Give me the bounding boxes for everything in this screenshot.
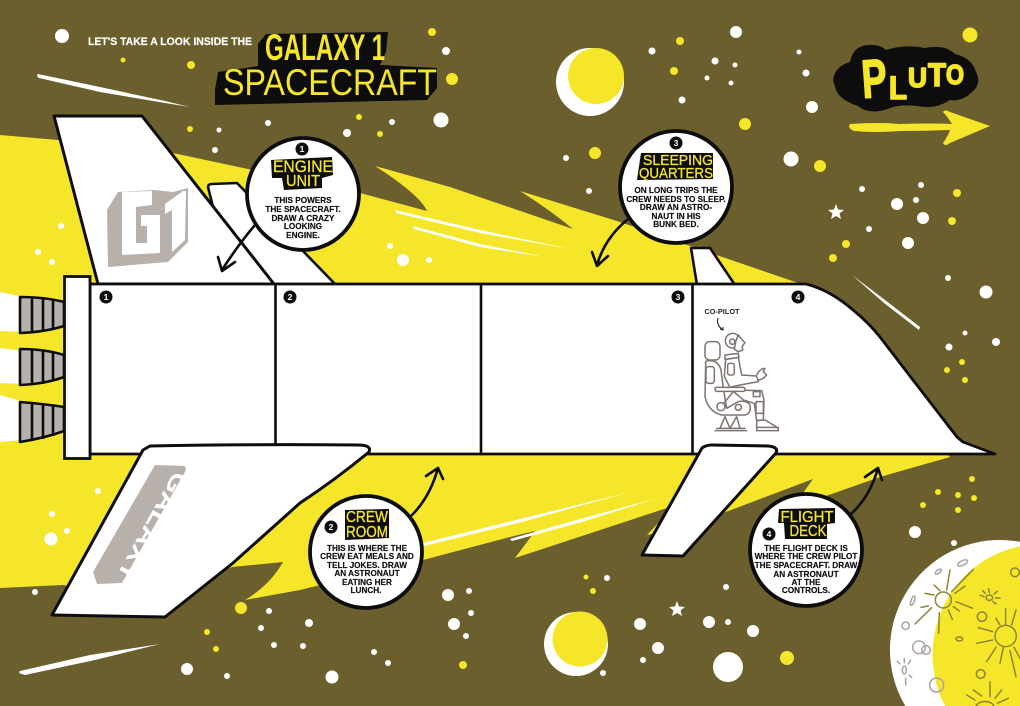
- arrow: flight deck: [850, 468, 882, 515]
- tail fin: [54, 116, 274, 284]
- G1 logo: [107, 188, 188, 267]
- planet with craters: [890, 540, 1020, 706]
- callout: flight deck: DECK: [790, 523, 827, 540]
- body text: TELL JOKES. DRAW: [327, 561, 407, 570]
- Pluto sign: O: [946, 59, 964, 90]
- top fin: [691, 248, 735, 285]
- right wing: [642, 445, 777, 556]
- main title: SPACECRAFT: [223, 62, 437, 103]
- body text: WHERE THE CREW PILOT: [755, 552, 857, 561]
- body text: BUNK BED.: [653, 220, 699, 229]
- body text: LOOKING: [284, 222, 322, 231]
- moon: top: [556, 48, 624, 116]
- moon: bottom: [544, 612, 608, 676]
- callout: engine unit: [247, 138, 359, 250]
- body text: ENGINE.: [286, 231, 320, 240]
- callout: crew room: [310, 496, 422, 608]
- wing lettering: [93, 465, 193, 587]
- callout: crew room: ROOM: [346, 524, 388, 541]
- wing lettering: GALAXY: [111, 467, 193, 587]
- body text: LUNCH.: [351, 586, 381, 595]
- callout: sleeping quarters: SLEEPING: [643, 152, 713, 169]
- body text: [265, 196, 341, 240]
- body text: [755, 544, 858, 595]
- body text: AT THE: [792, 578, 821, 587]
- callout: sleeping quarters: 3: [674, 138, 679, 148]
- Pluto sign: T: [928, 57, 946, 93]
- arrow: engine unit: [218, 225, 255, 271]
- body text: AN ASTRONAUT: [334, 569, 400, 578]
- callout: flight deck: [750, 494, 862, 606]
- Pluto sign: L: [889, 70, 907, 106]
- Pluto sign: [833, 45, 978, 112]
- yellow exhaust flame: [0, 135, 950, 600]
- spacecraft hull: [90, 284, 995, 454]
- callout: sleeping quarters: QUARTERS: [639, 165, 713, 182]
- body text: THE SPACECRAFT. DRAW: [755, 561, 858, 570]
- Pluto sign: P: [860, 48, 889, 110]
- co-pilot label: [704, 307, 740, 330]
- engine nozzles: [20, 297, 64, 442]
- intro line: LET'S TAKE A LOOK INSIDE THE: [88, 36, 252, 48]
- white exhaust streaks: [0, 74, 920, 675]
- section numbers: 2: [288, 292, 293, 302]
- main title: [215, 27, 437, 105]
- co-pilot astronaut: [705, 333, 778, 431]
- engine end cap: [64, 276, 90, 458]
- body text: NAUT IN HIS: [651, 212, 701, 221]
- section numbers: 4: [796, 292, 801, 302]
- Pluto sign: U: [908, 62, 927, 93]
- callout: flight deck: 4: [767, 529, 772, 539]
- callout: engine unit: ENGINE: [273, 157, 333, 176]
- body text: DRAW A CRAZY: [271, 214, 335, 223]
- left wing with GALAXY logo: [52, 445, 370, 617]
- yellow stars: [120, 28, 978, 669]
- body text: [626, 186, 726, 229]
- body text: CREW NEEDS TO SLEEP.: [626, 195, 726, 204]
- callout: sleeping quarters: [620, 131, 732, 243]
- body text: CONTROLS.: [782, 586, 830, 595]
- body text: THIS POWERS: [274, 196, 332, 205]
- arrow: crew room: [412, 468, 443, 515]
- body text: ON LONG TRIPS THE: [634, 186, 718, 195]
- callout: crew room: CREW: [346, 509, 389, 526]
- body text: AN ASTRONAUT: [773, 570, 839, 579]
- rear fin: [208, 183, 335, 284]
- body text: THE FLIGHT DECK IS: [764, 544, 848, 553]
- arrow to Pluto: [849, 110, 990, 145]
- section numbers: [100, 290, 804, 304]
- main title: GALAXY 1: [265, 27, 385, 68]
- callout: engine unit: UNIT: [286, 173, 320, 190]
- body text: THE SPACECRAFT.: [265, 205, 341, 214]
- body text: EATING HER: [342, 578, 392, 587]
- callout: flight deck: FLIGHT: [780, 509, 834, 526]
- body text: THIS IS WHERE THE: [327, 544, 408, 553]
- section numbers: 3: [676, 292, 681, 302]
- body text: CREW EAT MEALS AND: [320, 552, 414, 561]
- callout: engine unit: 1: [300, 144, 305, 154]
- co-pilot label: CO-PILOT: [704, 307, 740, 316]
- arrow: sleeping quarters: [592, 220, 627, 266]
- body text: DRAW AN ASTRO-: [640, 203, 712, 212]
- callout: crew room: 2: [329, 522, 334, 532]
- body text: [320, 544, 414, 595]
- section numbers: 1: [104, 292, 109, 302]
